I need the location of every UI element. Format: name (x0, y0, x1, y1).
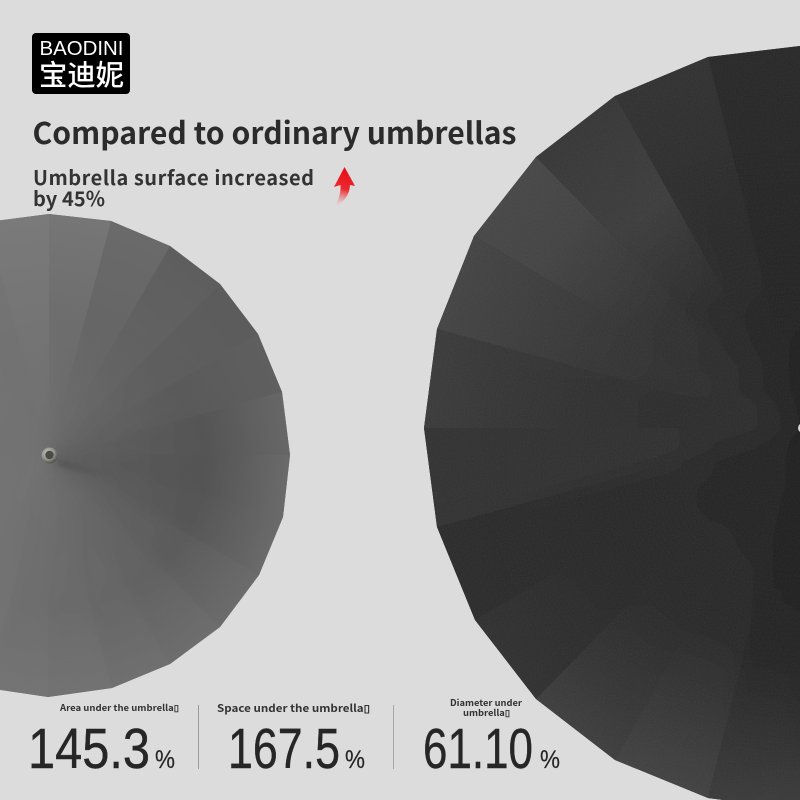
logo: BAODINI: BAODINI (40, 38, 124, 60)
stat: area under the umbrella: % (155, 746, 175, 774)
icon: red up arrow (334, 167, 355, 206)
stat: diameter under umbrella: % (540, 746, 560, 774)
icon: small umbrella hub (42, 448, 58, 464)
title: Compared to ordinary umbrellas (32, 109, 516, 153)
logo: BAODINI (32, 33, 130, 94)
small ordinary umbrella (0, 214, 290, 697)
subtitle (33, 162, 314, 212)
stat: space under the umbrella: % (345, 746, 365, 774)
stat: diameter under umbrella: 61.10 (423, 717, 533, 781)
divider (393, 705, 394, 769)
divider (198, 705, 199, 769)
stat: diameter under umbrella: Diameter under (450, 696, 522, 709)
icon: large umbrella hub (798, 423, 800, 433)
stat: area under the umbrella: Area under the umbrella▯ (59, 701, 179, 714)
stat: area under the umbrella: 145.3 (28, 717, 150, 781)
subtitle: Umbrella surface increased (33, 162, 314, 191)
large enlarged umbrella (400, 30, 800, 800)
hub shadow (55, 458, 115, 478)
stat: space under the umbrella: Space under the umbrella▯ (217, 701, 370, 716)
stat: diameter under umbrella: umbrella▯ (463, 706, 510, 719)
subtitle: by 45% (33, 183, 105, 212)
logo: BAODINI: 宝迪妮 (39, 53, 124, 94)
stat: space under the umbrella: 167.5 (228, 717, 340, 781)
